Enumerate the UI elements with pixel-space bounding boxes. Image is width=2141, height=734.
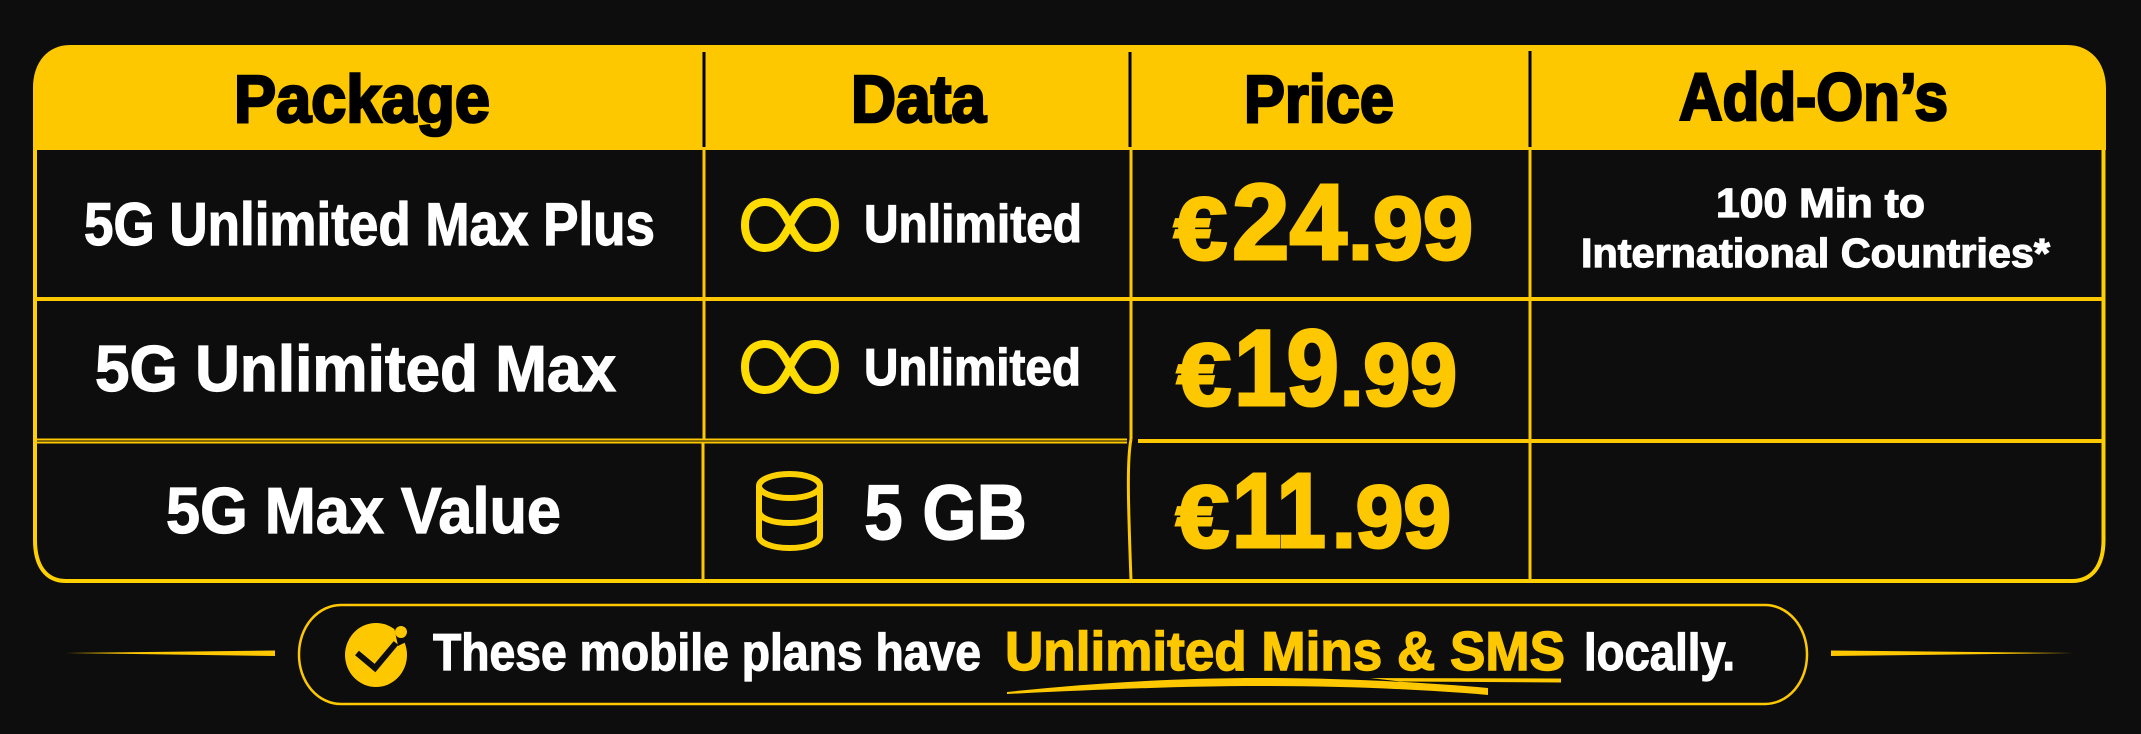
row 2: package name: 5G Unlimited Max <box>95 332 616 405</box>
row 2: price: .99 <box>1340 325 1457 424</box>
icon: infinity <box>745 344 835 390</box>
note text: tail: locally. <box>1584 624 1735 682</box>
row 1: package name: 5G Unlimited Max Plus <box>84 191 655 258</box>
row 1: add-on: International Countries* <box>1581 230 2050 276</box>
header: Add-On's: Add-On’s <box>1679 60 1948 135</box>
row 1: price: .99 <box>1348 178 1473 278</box>
row 1: price <box>1174 161 1473 282</box>
right footer line <box>1831 650 2073 656</box>
note text: lead: These mobile plans have <box>433 624 981 682</box>
row 3: price: .99 <box>1332 467 1451 566</box>
header: Price: Price <box>1244 62 1394 137</box>
icon: data cylinder <box>759 474 820 548</box>
header band <box>33 45 2106 150</box>
row 1: data: Unlimited <box>864 195 1082 254</box>
row 1: price: € <box>1174 179 1227 278</box>
left footer line <box>66 650 275 656</box>
row 1: price: 24 <box>1232 161 1347 282</box>
row 2: price: € <box>1177 325 1231 424</box>
row 2: data: Unlimited <box>864 339 1081 397</box>
pricing table <box>33 45 2106 581</box>
footer note pill <box>299 605 1807 704</box>
header: Package: Package <box>234 62 490 137</box>
highlight underline swoosh <box>1007 678 1561 695</box>
header: Data: Data <box>851 62 987 137</box>
row 2: price <box>1177 307 1457 428</box>
row 2: price: 19 <box>1234 307 1339 428</box>
row 1: add-on <box>1581 180 2050 276</box>
row 3: price <box>1176 452 1451 570</box>
row 3: package name: 5G Max Value <box>166 474 561 547</box>
row 1: add-on: 100 Min to <box>1716 180 1925 226</box>
table outline <box>35 150 2104 581</box>
icon: infinity <box>745 202 835 248</box>
row 3: price: 11 <box>1232 452 1326 570</box>
note text: highlight: Unlimited Mins & SMS <box>1005 620 1565 682</box>
row 3: data: 5 GB <box>864 468 1027 556</box>
row 3: price: € <box>1176 467 1229 566</box>
icon: check badge <box>345 622 410 687</box>
